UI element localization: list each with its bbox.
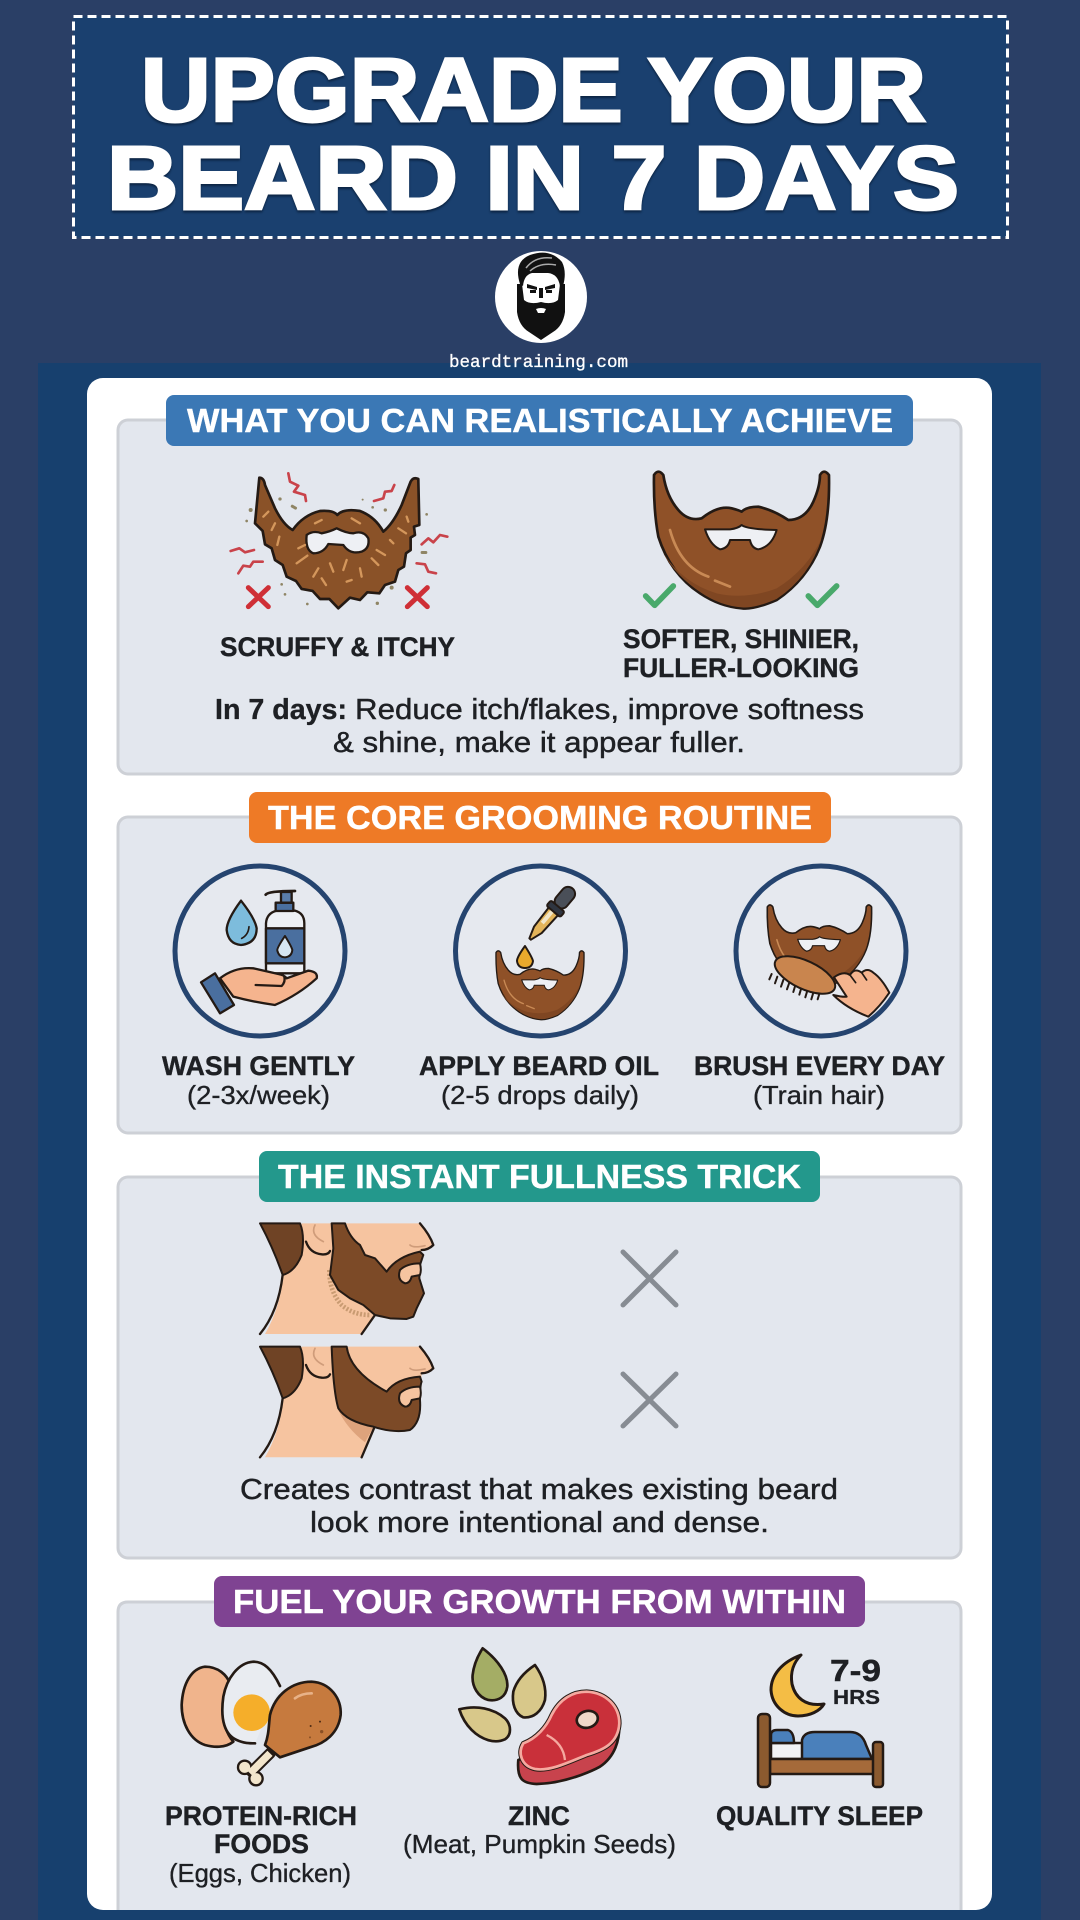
heading pill: fuel: FUEL YOUR GROWTH FROM WITHIN <box>233 1583 846 1620</box>
icon: moon and bed <box>758 1653 883 1787</box>
title banner <box>74 16 1008 238</box>
label: softer: FULLER-LOOKING <box>623 653 859 683</box>
icon: smooth beard <box>646 472 837 609</box>
labels: nutrition: PROTEIN-RICH <box>165 1801 357 1831</box>
dropper <box>523 883 579 945</box>
labels: nutrition: FOODS <box>214 1829 309 1859</box>
labels: routine steps <box>162 1051 945 1110</box>
green checks <box>646 586 837 605</box>
text: in 7 days: In 7 days: <box>215 694 347 726</box>
labels: nutrition: (Meat, Pumpkin Seeds) <box>403 1829 676 1859</box>
itch squiggles and flakes <box>231 473 447 573</box>
heading pill: routine <box>249 792 831 843</box>
title: UPGRADE YOUR <box>141 41 926 141</box>
label: scruffy: SCRUFFY & ITCHY <box>220 632 455 662</box>
labels: nutrition: ZINC <box>508 1801 570 1831</box>
logo: bearded man <box>495 251 587 343</box>
illustration: scruffy neckline profile <box>260 1223 433 1334</box>
heading pill: trick <box>259 1151 820 1202</box>
panel: core grooming routine <box>118 792 961 1133</box>
website label: beardtraining.com <box>449 353 628 373</box>
heading pill: routine: THE CORE GROOMING ROUTINE <box>268 799 812 836</box>
placeholder cross 2 <box>623 1374 676 1426</box>
text: contrast explanation: Creates contrast that makes existing beard <box>240 1474 838 1506</box>
heading pill: achieve: WHAT YOU CAN REALISTICALLY ACHIEVE <box>187 402 893 439</box>
heading pill: fuel <box>214 1576 865 1627</box>
white card <box>87 378 992 1910</box>
red crosses <box>248 588 427 607</box>
heading pill: achieve <box>166 395 913 446</box>
icon: seeds and steak <box>459 1648 619 1784</box>
labels: routine steps: (Train hair) <box>753 1080 885 1110</box>
text: in 7 days: Reduce itch/flakes, improve softness <box>355 694 864 726</box>
label: softer: SOFTER, SHINIER, <box>623 624 859 654</box>
label: softer <box>623 624 859 683</box>
text: contrast explanation: look more intentional and dense. <box>310 1507 769 1539</box>
icon: brush beard <box>736 866 906 1036</box>
inner dark blue panel <box>38 363 1041 1920</box>
title: BEARD IN 7 DAYS <box>107 129 959 229</box>
illustration: defined neckline profile <box>260 1347 433 1457</box>
icon: moon and bed: HRS <box>833 1687 880 1709</box>
labels: routine steps: (2-5 drops daily) <box>441 1080 639 1110</box>
labels: nutrition: QUALITY SLEEP <box>716 1801 923 1831</box>
icon: beard oil <box>456 866 626 1036</box>
labels: routine steps: (2-3x/week) <box>187 1080 330 1110</box>
oil drop <box>517 946 533 968</box>
labels: nutrition <box>165 1801 923 1888</box>
heading pill: trick: THE INSTANT FULLNESS TRICK <box>278 1158 801 1195</box>
placeholder cross 1 <box>623 1252 676 1305</box>
panel: what you can realistically achieve <box>118 395 961 774</box>
panel: instant fullness trick <box>118 1151 961 1558</box>
icon: moon and bed: 7-9 <box>830 1653 881 1688</box>
title <box>107 41 959 229</box>
text: contrast explanation <box>240 1474 838 1539</box>
labels: routine steps: APPLY BEARD OIL <box>419 1051 659 1081</box>
icon: scruffy beard <box>231 473 447 608</box>
icon: egg and chicken <box>182 1662 341 1785</box>
panel: fuel your growth <box>118 1576 961 1920</box>
text: in 7 days <box>215 694 864 759</box>
labels: routine steps: WASH GENTLY <box>162 1051 355 1081</box>
bottom strip of inner panel <box>38 1910 1041 1920</box>
labels: routine steps: BRUSH EVERY DAY <box>694 1051 945 1081</box>
text: in 7 days: & shine, make it appear fuller. <box>333 727 745 759</box>
labels: nutrition: (Eggs, Chicken) <box>169 1858 351 1888</box>
icon: wash <box>175 866 345 1036</box>
